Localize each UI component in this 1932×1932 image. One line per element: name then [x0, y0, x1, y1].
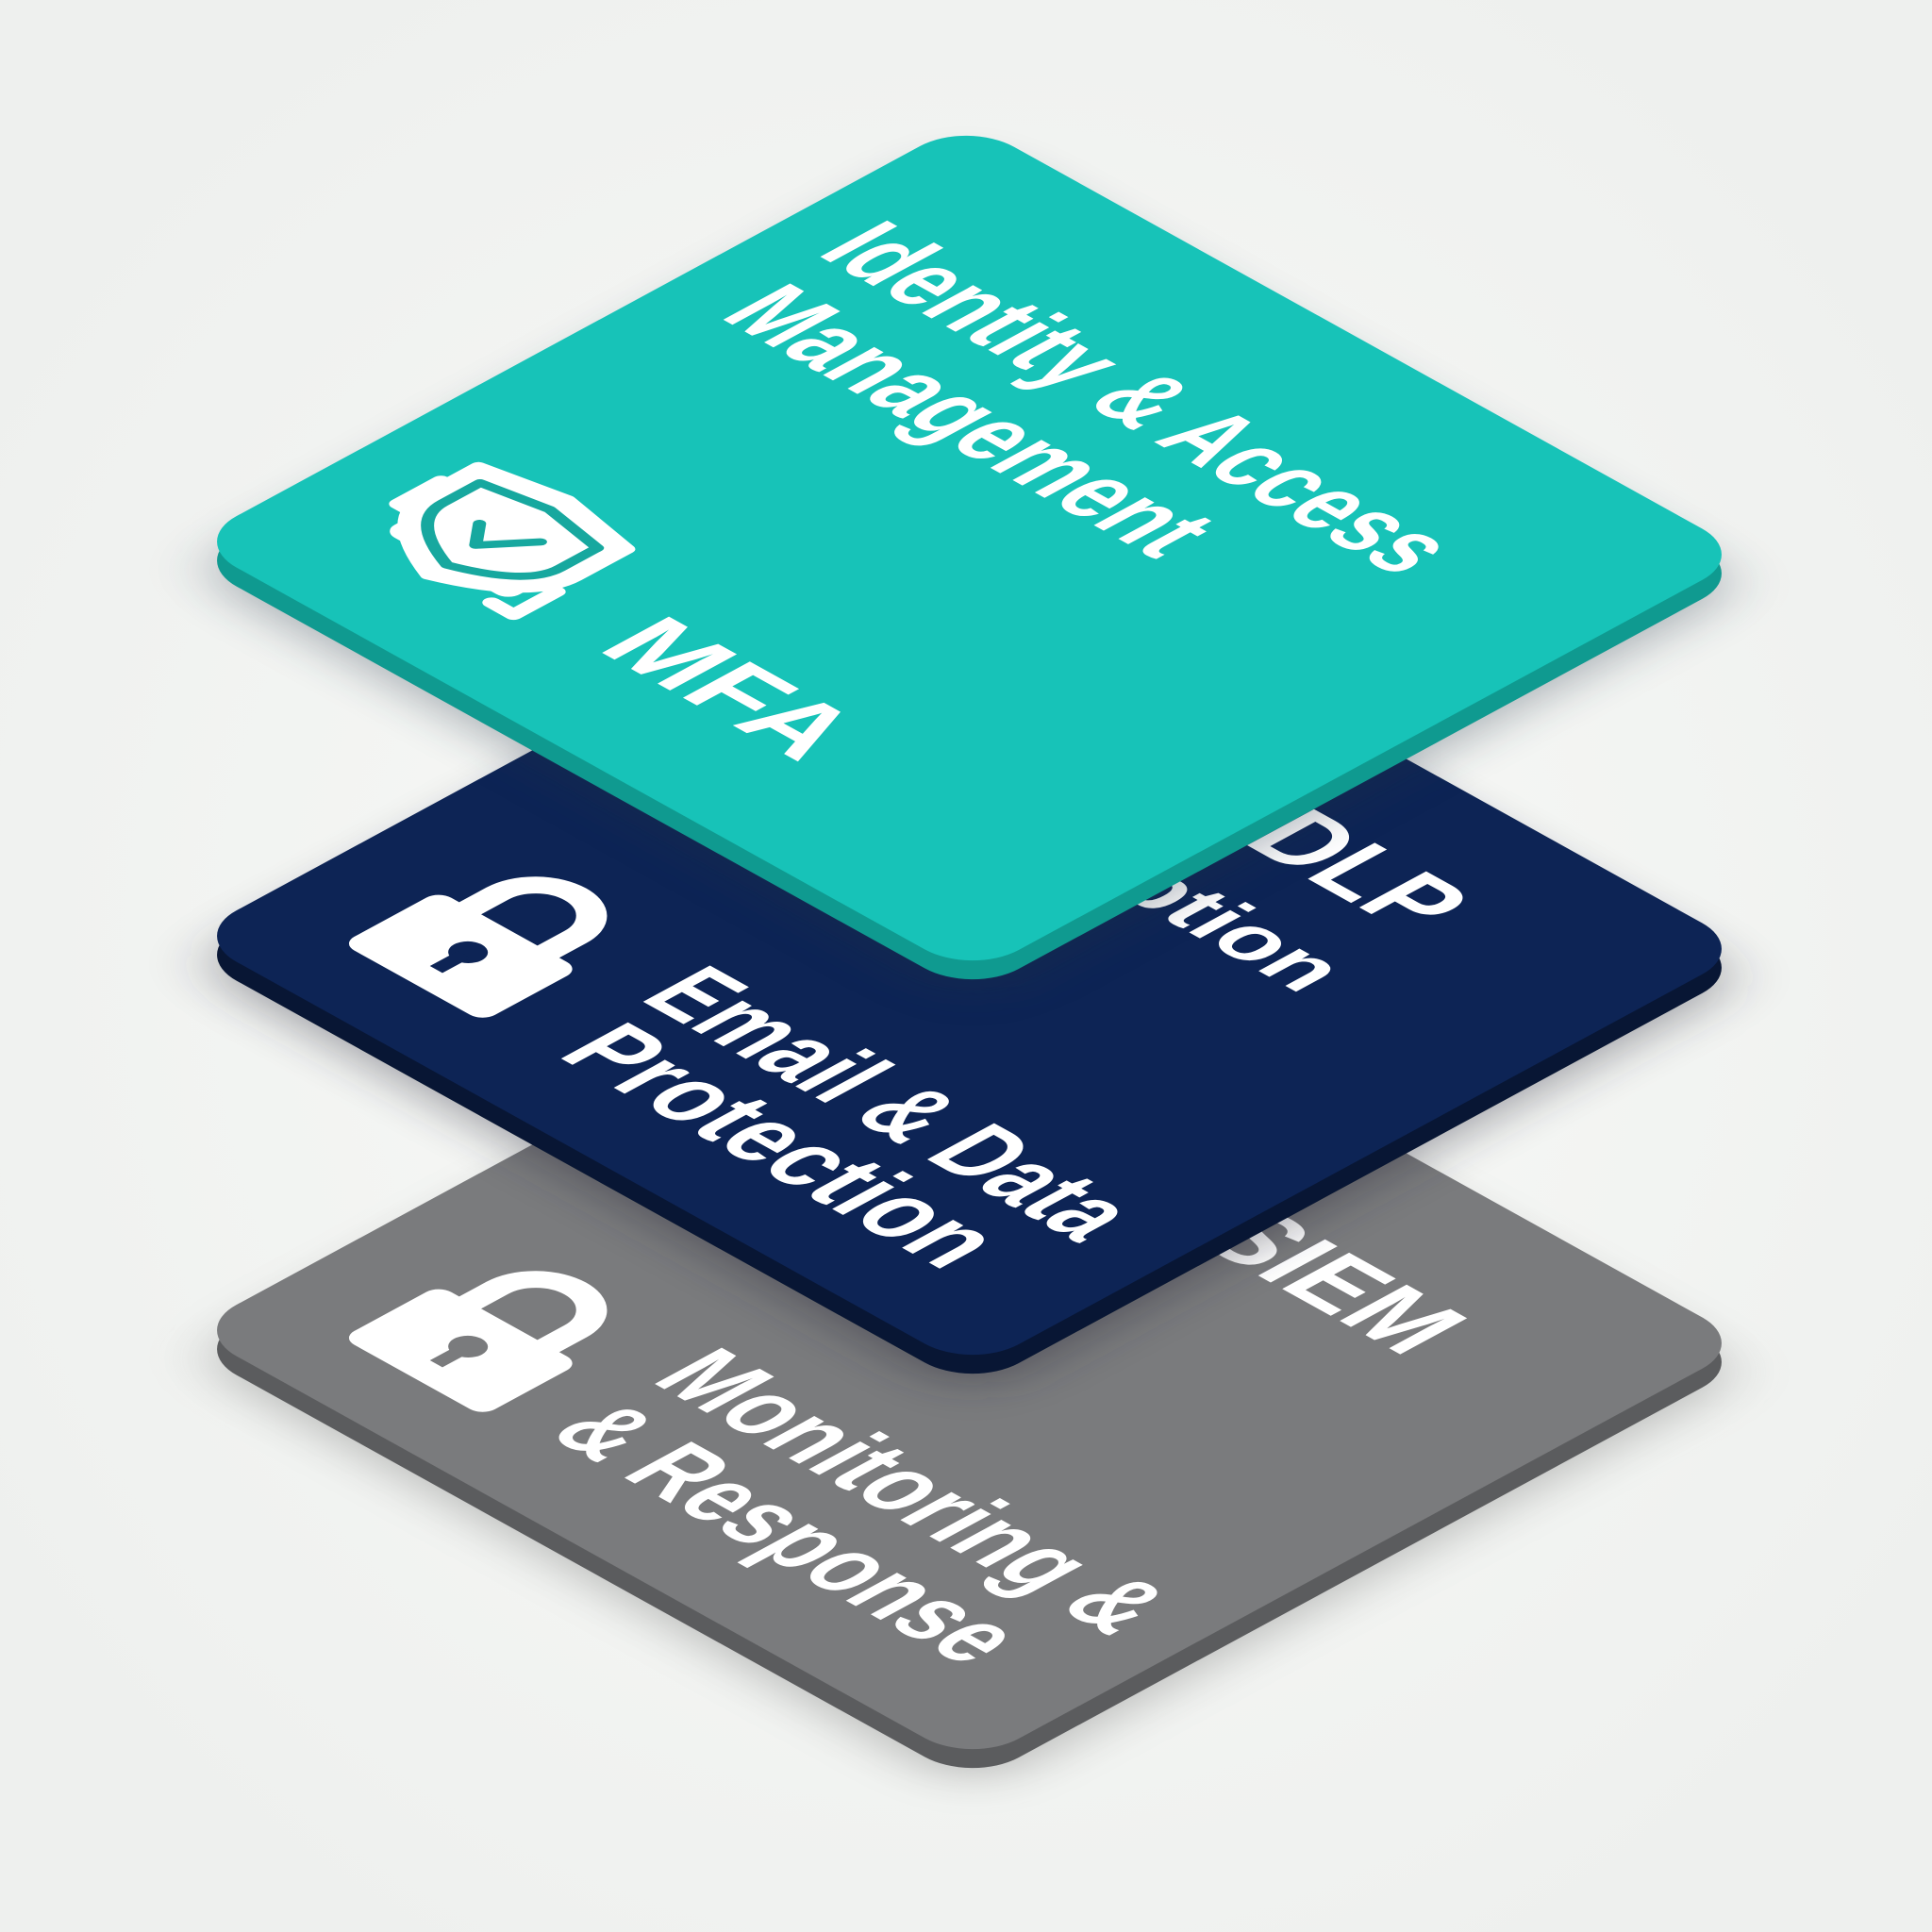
layer: monitoring & response (gray) — [190, 909, 1749, 1792]
label: Encryption: Encryption — [876, 730, 1371, 1004]
layer: email & data protection (navy) — [190, 515, 1749, 1398]
title: Email & Data Protection: Protection — [535, 1008, 1033, 1282]
label: MFA: MFA — [575, 602, 889, 774]
icon: shield with laptop — [349, 456, 645, 619]
title: Identity & Access Management: Identity & Access — [795, 207, 1487, 589]
label: DLP: DLP — [1221, 794, 1498, 946]
title: Monitoring & Response: Monitoring & — [629, 1333, 1200, 1648]
title: Monitoring & Response: & Response — [526, 1387, 1054, 1678]
layer: identity & access management (teal) — [190, 121, 1749, 1004]
label: SIEM: SIEM — [1174, 1192, 1494, 1369]
icon: lock (gray) — [341, 1249, 645, 1416]
icon: lock (navy) — [341, 855, 645, 1022]
title: Identity & Access Management: Management — [698, 269, 1244, 571]
title: Email & Data Protection: Email & Data — [618, 951, 1168, 1255]
